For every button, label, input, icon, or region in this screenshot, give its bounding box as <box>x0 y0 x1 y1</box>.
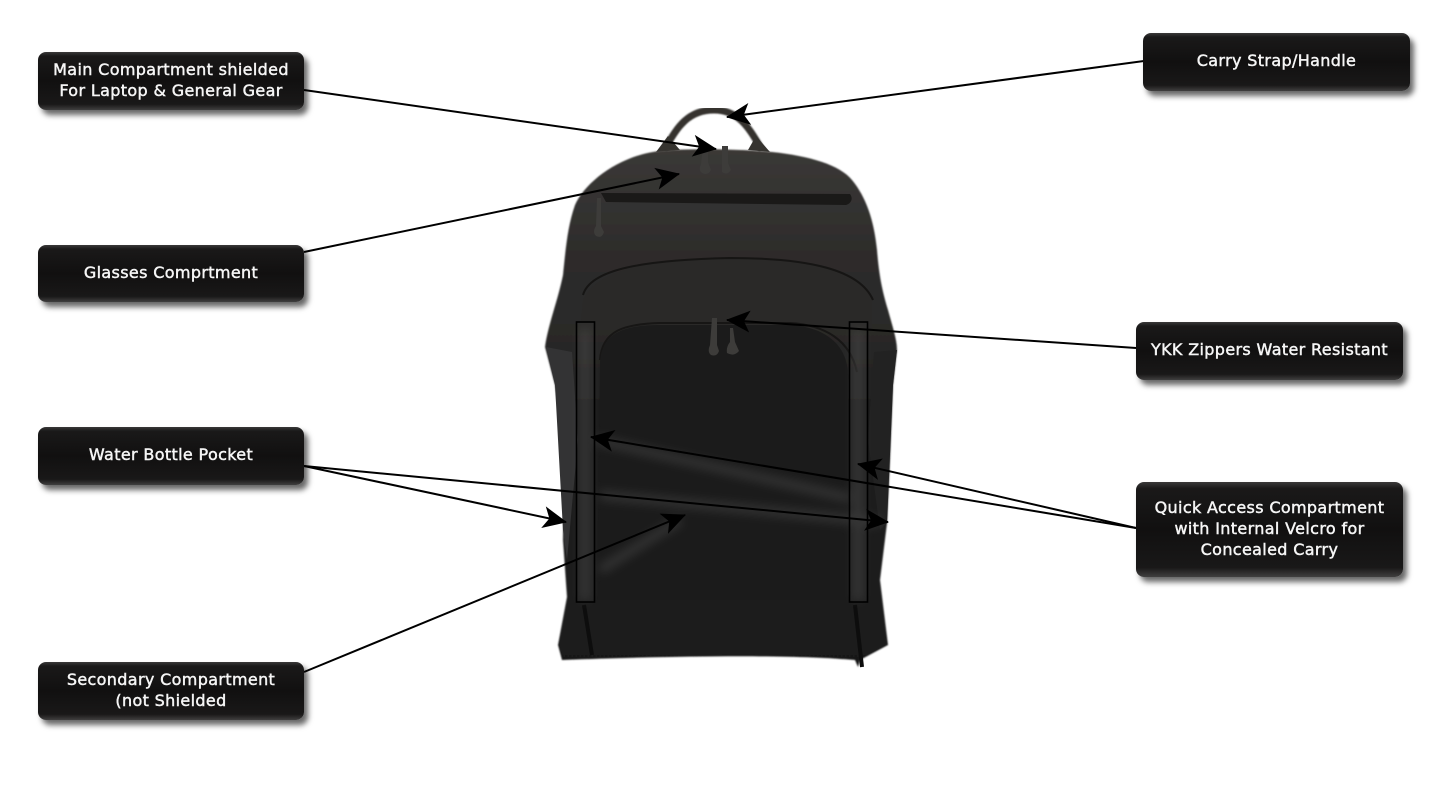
label: water bottle pocket: Water Bottle Pocket <box>89 445 253 464</box>
label: YKK zippers <box>1136 322 1403 380</box>
label: quick access compartment: Quick Access Compartment <box>1155 498 1384 517</box>
body silhouette <box>545 149 897 667</box>
arrow: water bottle left <box>304 466 566 522</box>
label: main compartment <box>38 52 304 110</box>
backpack photo <box>545 110 897 667</box>
label: carry strap <box>1143 33 1410 91</box>
arrow: quick access left <box>591 437 1136 528</box>
arrows <box>304 61 1144 672</box>
label: secondary compartment <box>38 662 304 720</box>
label: carry strap: Carry Strap/Handle <box>1197 51 1356 70</box>
label: main compartment: Main Compartment shielded <box>53 60 289 79</box>
bottom zips <box>584 605 862 667</box>
side pockets <box>546 347 578 560</box>
quick access bracket right <box>850 322 868 602</box>
label: main compartment: For Laptop & General Gear <box>59 81 283 100</box>
lighter panel band <box>580 258 872 330</box>
highlight glows <box>585 330 880 600</box>
label: quick access compartment: Concealed Carry <box>1201 540 1338 559</box>
arrow: YKK zippers <box>727 320 1136 348</box>
label: glasses compartment <box>38 245 304 302</box>
label: water bottle pocket <box>38 427 304 485</box>
label: secondary compartment: (not Shielded <box>115 691 227 710</box>
label: quick access compartment: with Internal Velcro for <box>1174 519 1365 538</box>
label: YKK zippers: YKK Zippers Water Resistant <box>1151 340 1388 359</box>
arrow: main compartment <box>304 90 716 149</box>
label: quick access compartment <box>1136 482 1403 577</box>
arrow: secondary compartment <box>304 515 685 672</box>
handle <box>664 110 762 150</box>
label: glasses compartment: Glasses Comprtment <box>84 263 258 282</box>
front panel <box>597 325 848 600</box>
arrow: water bottle right <box>304 466 888 522</box>
quick access bracket left <box>576 322 594 602</box>
label: secondary compartment: Secondary Compartment <box>67 670 275 689</box>
seams <box>601 193 852 205</box>
arrow: glasses compartment <box>304 174 679 252</box>
arrow: quick access right <box>858 464 1136 528</box>
zipper pulls <box>594 146 739 356</box>
arrow: carry handle <box>727 61 1144 117</box>
